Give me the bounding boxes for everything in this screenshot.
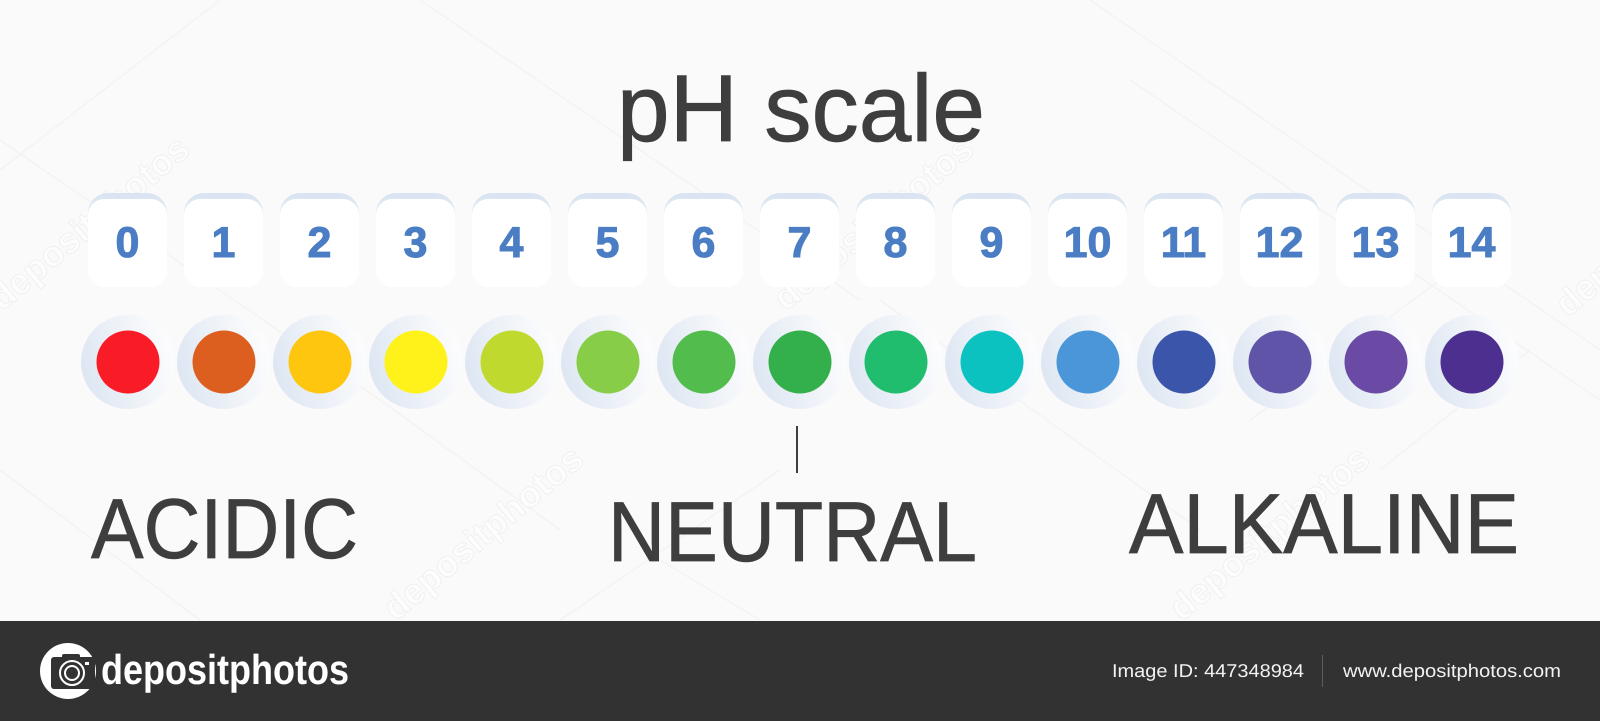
number scale cards: [88, 193, 1511, 287]
circle 9 teal: [945, 315, 1039, 409]
card 2: [280, 193, 359, 287]
card 5: 5: [596, 219, 619, 267]
card 6: [664, 193, 743, 287]
neutral tick mark: [796, 426, 798, 473]
watermark text: [0, 127, 1600, 628]
card 11: 11: [1161, 219, 1206, 267]
card 12: 12: [1256, 219, 1303, 267]
card 0: [88, 193, 167, 287]
watermark text: depositphotos: [375, 437, 591, 628]
card 10: [1048, 193, 1127, 287]
circle 2 amber: [273, 315, 367, 409]
card 14: 14: [1448, 219, 1495, 267]
card 13: [1336, 193, 1415, 287]
card 3: 3: [404, 219, 427, 267]
circle 11 blue: [1137, 315, 1231, 409]
card 9: 9: [980, 219, 1003, 267]
label: acidic: ACIDIC: [91, 482, 358, 577]
icon: camera logo: [40, 643, 96, 699]
card 1: [184, 193, 263, 287]
title: pH scale: [617, 56, 985, 162]
circle 5 light green: [561, 315, 655, 409]
card 13: 13: [1352, 219, 1399, 267]
card 6: 6: [692, 219, 715, 267]
circle 14 deep purple: [1425, 315, 1519, 409]
circle 12 indigo: [1233, 315, 1327, 409]
label: alkaline: ALKALINE: [1129, 477, 1519, 572]
watermark text: depositphotos: [1161, 437, 1377, 628]
colour circles: [81, 315, 1519, 409]
card 14: [1432, 193, 1511, 287]
watermark text: depositphotos: [765, 127, 981, 318]
card 8: 8: [884, 219, 907, 267]
card 1: 1: [212, 219, 235, 267]
card 10: 10: [1064, 219, 1111, 267]
card 9: [952, 193, 1031, 287]
circle 4 lime: [465, 315, 559, 409]
circle 10 sky blue: [1041, 315, 1135, 409]
circle 1 orange: [177, 315, 271, 409]
card 4: 4: [500, 219, 524, 267]
card 12: [1240, 193, 1319, 287]
card 7: 7: [788, 219, 811, 267]
website url: www.depositphotos.com: [1342, 660, 1561, 681]
circle 8 emerald: [849, 315, 943, 409]
card 0: 0: [116, 219, 139, 267]
card 4: [472, 193, 551, 287]
card 5: [568, 193, 647, 287]
card 8: [856, 193, 935, 287]
circle 6 green: [657, 315, 751, 409]
circle 0 red: [81, 315, 175, 409]
circle 13 violet: [1329, 315, 1423, 409]
card 3: [376, 193, 455, 287]
footer bar: [0, 621, 1600, 721]
card 7: [760, 193, 839, 287]
label: neutral: NEUTRAL: [608, 485, 977, 580]
card 2: 2: [308, 219, 331, 267]
circle 3 yellow: [369, 315, 463, 409]
card 11: [1144, 193, 1223, 287]
logo wordmark: depositphotos: [101, 646, 349, 693]
image id: Image ID: 447348984: [1112, 660, 1304, 681]
circle 7 dark green: [753, 315, 847, 409]
